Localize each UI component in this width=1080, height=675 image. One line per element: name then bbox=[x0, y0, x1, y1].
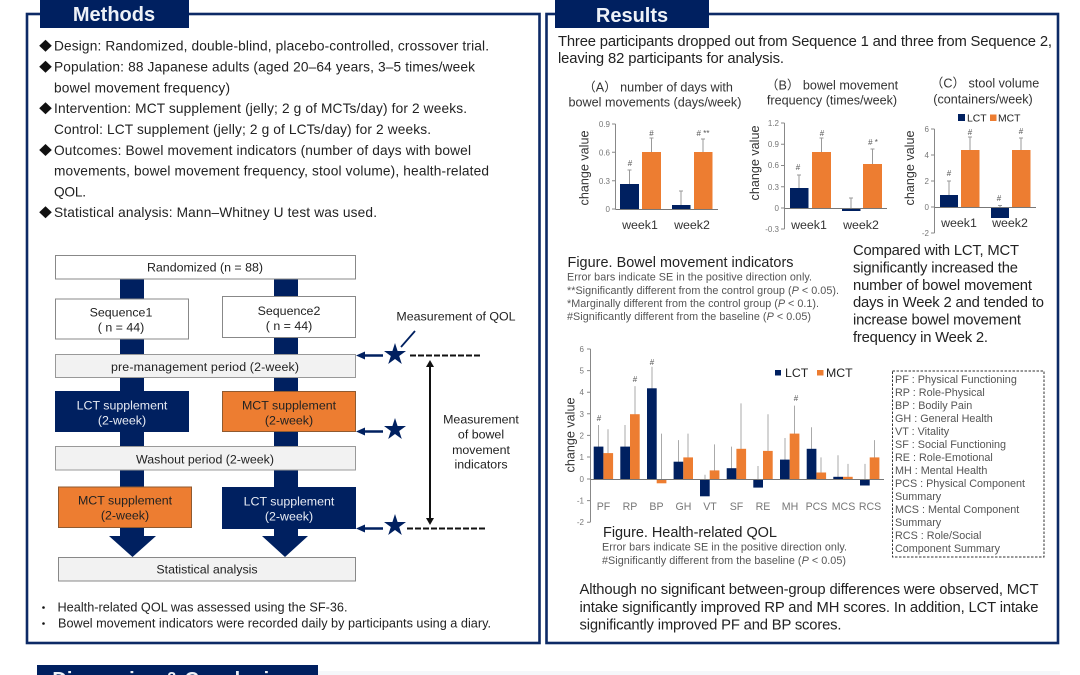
text block: QOL finding: significantly improved PF and BP scores. bbox=[580, 618, 842, 634]
text block: study design list: Intervention: MCT supplement (jelly; 2 g of MCTs/day) for 2 weeks. bbox=[54, 101, 467, 116]
chart A: number of days with bowel movements bbox=[569, 80, 741, 232]
caption: health-related QOL: Figure. Health-related QOL bbox=[603, 525, 777, 541]
chart C: stool volume: week1 bbox=[940, 216, 977, 230]
heading: discussion and conclusion bbox=[37, 665, 318, 675]
caption: bowel movement indicators: #Significantly different from the baseline (P < 0.05) bbox=[567, 311, 811, 323]
x-axis labels: PCS bbox=[806, 501, 827, 513]
text block: bowel movement finding: increase bowel movement bbox=[853, 312, 1021, 328]
chart B: bowel movement frequency: -0.3 bbox=[765, 225, 780, 234]
legend box: QOL abbreviations: GH : General Health bbox=[895, 413, 993, 425]
box: MCT supplement, sequence 1: (2-week) bbox=[101, 508, 149, 522]
box: LCT supplement, sequence 2: LCT supplement bbox=[244, 494, 335, 508]
chart: health-related QOL: # bbox=[633, 375, 638, 384]
box: LCT supplement, sequence 2 bbox=[222, 487, 356, 529]
arrow: bowel measurement span bbox=[407, 356, 485, 528]
heading: methods bbox=[40, 0, 189, 28]
box: pre-management period: pre-management period (2-week) bbox=[111, 360, 299, 374]
legend box: QOL abbreviations: VT : Vitality bbox=[895, 426, 950, 438]
y-axis ticks: 2 bbox=[580, 432, 585, 440]
legend box: QOL abbreviations bbox=[892, 371, 1044, 557]
text block: study design list: Design: Randomized, double-blind, placebo-controlled, crossover trial. bbox=[54, 39, 489, 54]
legend box: QOL abbreviations: SF : Social Functioning bbox=[895, 439, 1006, 451]
chart B: bowel movement frequency: （B） bowel movement bbox=[766, 78, 899, 92]
bars: LCT bbox=[594, 388, 870, 496]
text block: study design list: QOL. bbox=[54, 184, 86, 199]
legend box: QOL abbreviations: Summary bbox=[895, 491, 942, 503]
text block: QOL finding bbox=[580, 582, 1038, 634]
chart C: stool volume: 0 bbox=[925, 203, 930, 212]
box: randomized bbox=[56, 256, 356, 279]
chart C: stool volume: # bbox=[968, 128, 973, 137]
text block: study design list bbox=[39, 39, 489, 220]
chart B: bowel movement frequency: frequency (times/week) bbox=[767, 94, 897, 108]
arrow: QOL pointer bbox=[401, 331, 415, 347]
x-axis labels bbox=[597, 501, 881, 513]
text block: study design list: bowel movement frequency) bbox=[54, 80, 230, 95]
chart C: stool volume: (containers/week) bbox=[933, 92, 1033, 106]
chart B: bowel movement frequency: 0.9 bbox=[768, 140, 780, 149]
y-axis ticks: 1 bbox=[580, 453, 585, 462]
icon: star at pre-management bbox=[356, 343, 406, 364]
legend: QOL chart bbox=[775, 366, 853, 380]
chart: health-related QOL bbox=[564, 345, 884, 527]
box: LCT supplement, sequence 1 bbox=[55, 391, 189, 432]
y-axis ticks: 4 bbox=[580, 388, 585, 397]
chart B: bowel movement frequency: 0 bbox=[775, 204, 780, 213]
box: MCT supplement, sequence 1 bbox=[58, 487, 192, 528]
legend box: QOL abbreviations: Component Summary bbox=[895, 543, 1001, 555]
box: pre-management period bbox=[56, 354, 356, 378]
caption: bowel movement indicators: *Marginally different from the control group (P < 0.1). bbox=[567, 298, 819, 310]
box: sequence 1: ( n = 44) bbox=[98, 320, 144, 334]
text block: method notes: Health-related QOL was assessed using the SF-36. bbox=[58, 600, 348, 614]
legend box: QOL abbreviations: BP : Bodily Pain bbox=[895, 400, 972, 412]
chart A: number of days with bowel movements: week2 bbox=[673, 218, 710, 232]
label: measurement of bowel movement indicators bbox=[443, 412, 519, 472]
text block: study design list: Control: LCT supplement (jelly; 2 g of LCTs/day) for 2 weeks. bbox=[54, 122, 431, 137]
chart C: stool volume: （C） stool volume bbox=[931, 76, 1039, 90]
box: sequence 2: Sequence2 bbox=[258, 304, 320, 318]
text block: bowel movement finding: frequency in Week 2. bbox=[853, 330, 988, 346]
caption: bowel movement indicators bbox=[567, 255, 839, 323]
box: sequence 2 bbox=[222, 296, 356, 338]
caption: bowel movement indicators: Figure. Bowel movement indicators bbox=[568, 255, 794, 271]
legend box: QOL abbreviations: MH : Mental Health bbox=[895, 465, 987, 477]
chart C: stool volume: -2 bbox=[922, 229, 930, 238]
chart A: number of days with bowel movements: change value bbox=[578, 131, 592, 205]
arrow: sequence 1 flow bbox=[109, 279, 156, 557]
y-axis ticks: 3 bbox=[580, 410, 585, 419]
box: LCT supplement, sequence 2: (2-week) bbox=[265, 510, 313, 524]
box: randomized: Randomized (n = 88) bbox=[147, 260, 263, 274]
text block: QOL finding: intake significantly improved RP and MH scores. In addition, LCT intake bbox=[580, 600, 1038, 616]
icon: star after second supplement bbox=[356, 514, 406, 535]
chart A: number of days with bowel movements: （A） number of days with bbox=[583, 80, 733, 94]
legend: chart C: MCT bbox=[998, 114, 1021, 124]
x-axis labels: MH bbox=[782, 501, 798, 513]
error bars bbox=[598, 367, 874, 479]
chart B: bowel movement frequency: 0.3 bbox=[768, 183, 780, 192]
chart: health-related QOL: # bbox=[597, 414, 602, 423]
chart B: bowel movement frequency: 0.6 bbox=[768, 161, 780, 170]
box: washout period: Washout period (2-week) bbox=[136, 452, 274, 466]
chart C: stool volume bbox=[903, 76, 1039, 238]
label: measurement of QOL: Measurement of QOL bbox=[396, 310, 516, 324]
label: measurement of bowel movement indicators: indicators bbox=[454, 458, 508, 472]
text block: study design list: Outcomes: Bowel movement indicators (number of days with bowel bbox=[54, 143, 471, 158]
chart C: stool volume: # bbox=[1019, 127, 1024, 136]
panel: methods bbox=[27, 0, 540, 643]
text block: method notes bbox=[42, 600, 491, 630]
legend box: QOL abbreviations: MCS : Mental Component bbox=[895, 504, 1019, 516]
caption: bowel movement indicators: **Significantly different from the control group (P < 0.05). bbox=[567, 285, 839, 297]
chart B: bowel movement frequency: change value bbox=[748, 126, 762, 200]
chart A: number of days with bowel movements: 0.6 bbox=[599, 148, 611, 158]
x-axis labels: PF bbox=[597, 501, 611, 513]
legend box: QOL abbreviations: RP : Role-Physical bbox=[895, 387, 985, 399]
chart B: bowel movement frequency: week1 bbox=[790, 218, 827, 232]
legend box: QOL abbreviations: PF : Physical Functioning bbox=[895, 374, 1017, 386]
chart C: stool volume: # bbox=[947, 169, 952, 178]
chart C: stool volume: # bbox=[997, 194, 1002, 203]
chart B: bowel movement frequency: # bbox=[820, 129, 825, 138]
chart C: stool volume: 2 bbox=[925, 177, 930, 186]
legend box: QOL abbreviations: Summary bbox=[895, 517, 942, 529]
y-axis ticks: 5 bbox=[580, 367, 585, 376]
icon: star after first supplement bbox=[356, 418, 406, 439]
heading: methods: Methods bbox=[73, 4, 155, 26]
text block: bowel movement finding: Compared with LCT, MCT bbox=[853, 243, 1019, 259]
box: MCT supplement, sequence 2: (2-week) bbox=[265, 414, 313, 428]
text block: bowel movement finding bbox=[853, 243, 1044, 346]
x-axis labels: GH bbox=[676, 501, 691, 513]
chart A: number of days with bowel movements: 0.3 bbox=[599, 177, 611, 186]
text block: bowel movement finding: days in Week 2 and tended to bbox=[853, 295, 1044, 311]
chart A: number of days with bowel movements: bowel movements (days/week) bbox=[569, 96, 741, 110]
box: washout period bbox=[56, 446, 356, 470]
text block: participants: leaving 82 participants for analysis. bbox=[558, 51, 784, 67]
chart C: stool volume: change value bbox=[903, 131, 917, 205]
chart B: bowel movement frequency: # bbox=[796, 163, 801, 172]
x-axis labels: BP bbox=[649, 501, 664, 513]
x-axis labels: RCS bbox=[859, 501, 881, 513]
x-axis labels: RP bbox=[623, 501, 637, 513]
box: statistical analysis bbox=[58, 558, 356, 581]
box: MCT supplement, sequence 1: MCT supplement bbox=[78, 494, 173, 508]
bars: MCT bbox=[603, 414, 879, 483]
x-axis labels: VT bbox=[703, 501, 717, 513]
caption: health-related QOL: #Significantly different from the baseline (P < 0.05) bbox=[602, 555, 846, 567]
y-axis ticks bbox=[577, 345, 585, 527]
legend box: QOL abbreviations: PCS : Physical Component bbox=[895, 478, 1025, 490]
y-axis ticks: 6 bbox=[580, 345, 585, 354]
text block: method notes: Bowel movement indicators were recorded daily by participants using a diary. bbox=[58, 616, 491, 630]
legend: QOL chart: MCT bbox=[826, 366, 853, 380]
panel: discussion and conclusion bbox=[37, 665, 1060, 675]
text block: participants: Three participants dropped out from Sequence 1 and three from Sequence 2, bbox=[558, 34, 1052, 50]
chart C: stool volume: week2 bbox=[991, 216, 1028, 230]
chart A: number of days with bowel movements: 0 bbox=[606, 205, 611, 214]
x-axis labels: SF bbox=[730, 501, 744, 513]
box: MCT supplement, sequence 2 bbox=[222, 392, 356, 432]
text block: study design list: Statistical analysis: Mann–Whitney U test was used. bbox=[54, 205, 377, 220]
chart: health-related QOL: change value bbox=[564, 398, 578, 472]
text block: participants bbox=[558, 34, 1052, 67]
legend: QOL chart: LCT bbox=[785, 366, 809, 380]
heading: results: Results bbox=[596, 5, 668, 27]
panel: results bbox=[546, 0, 1058, 643]
text block: bowel movement finding: number of bowel movement bbox=[853, 278, 1032, 294]
text block: study design list: movements, bowel movement frequency, stool volume), health-related bbox=[54, 164, 489, 179]
chart: health-related QOL: # bbox=[794, 394, 799, 403]
x-axis labels: MCS bbox=[832, 501, 855, 513]
text block: study design list: Population: 88 Japanese adults (aged 20–64 years, 3–5 times/week bbox=[54, 60, 475, 74]
box: statistical analysis: Statistical analysis bbox=[156, 562, 258, 576]
y-axis ticks: 0 bbox=[580, 475, 585, 484]
x-axis labels: RE bbox=[756, 501, 770, 513]
chart B: bowel movement frequency: # * bbox=[868, 138, 878, 147]
chart C: stool volume: 6 bbox=[925, 125, 930, 134]
chart: health-related QOL: # bbox=[650, 358, 655, 367]
box: sequence 2: ( n = 44) bbox=[266, 319, 312, 333]
chart A: number of days with bowel movements: 0.9 bbox=[599, 120, 611, 129]
chart B: bowel movement frequency: week2 bbox=[842, 218, 879, 232]
text block: bowel movement finding: significantly increased the bbox=[853, 260, 1018, 276]
caption: health-related QOL bbox=[602, 525, 847, 567]
heading: results bbox=[555, 0, 709, 28]
label: measurement of bowel movement indicators: Measurement bbox=[443, 412, 519, 426]
label: measurement of bowel movement indicators: of bowel bbox=[458, 428, 504, 442]
box: LCT supplement, sequence 1: (2-week) bbox=[98, 414, 146, 428]
box: sequence 1: Sequence1 bbox=[90, 306, 152, 320]
chart B: bowel movement frequency bbox=[748, 78, 899, 234]
box: MCT supplement, sequence 2: MCT supplement bbox=[242, 398, 337, 412]
box: LCT supplement, sequence 1: LCT supplement bbox=[77, 398, 168, 412]
chart B: bowel movement frequency: 1.2 bbox=[768, 119, 780, 128]
y-axis ticks: -1 bbox=[577, 496, 585, 506]
caption: bowel movement indicators: Error bars indicate SE in the positive direction only. bbox=[567, 272, 812, 284]
flowchart: crossover trial design bbox=[55, 256, 519, 581]
chart A: number of days with bowel movements: # bbox=[649, 129, 654, 138]
legend box: QOL abbreviations: RCS : Role/Social bbox=[895, 530, 981, 542]
chart A: number of days with bowel movements: week1 bbox=[621, 218, 658, 232]
arrow: sequence 2 flow bbox=[262, 279, 308, 557]
text block: QOL finding: Although no significant between-group differences were observed, MCT bbox=[580, 582, 1038, 598]
y-axis ticks: -2 bbox=[577, 518, 585, 527]
chart A: number of days with bowel movements: # bbox=[628, 159, 633, 168]
legend: chart C bbox=[958, 114, 1021, 124]
label: measurement of bowel movement indicators: movement bbox=[452, 443, 510, 457]
chart C: stool volume: 4 bbox=[925, 151, 930, 160]
legend box: QOL abbreviations: RE : Role-Emotional bbox=[895, 452, 993, 464]
box: sequence 1 bbox=[56, 299, 188, 339]
legend: chart C: LCT bbox=[967, 114, 987, 124]
chart A: number of days with bowel movements: # ** bbox=[697, 129, 709, 138]
caption: health-related QOL: Error bars indicate SE in the positive direction only. bbox=[602, 542, 847, 554]
